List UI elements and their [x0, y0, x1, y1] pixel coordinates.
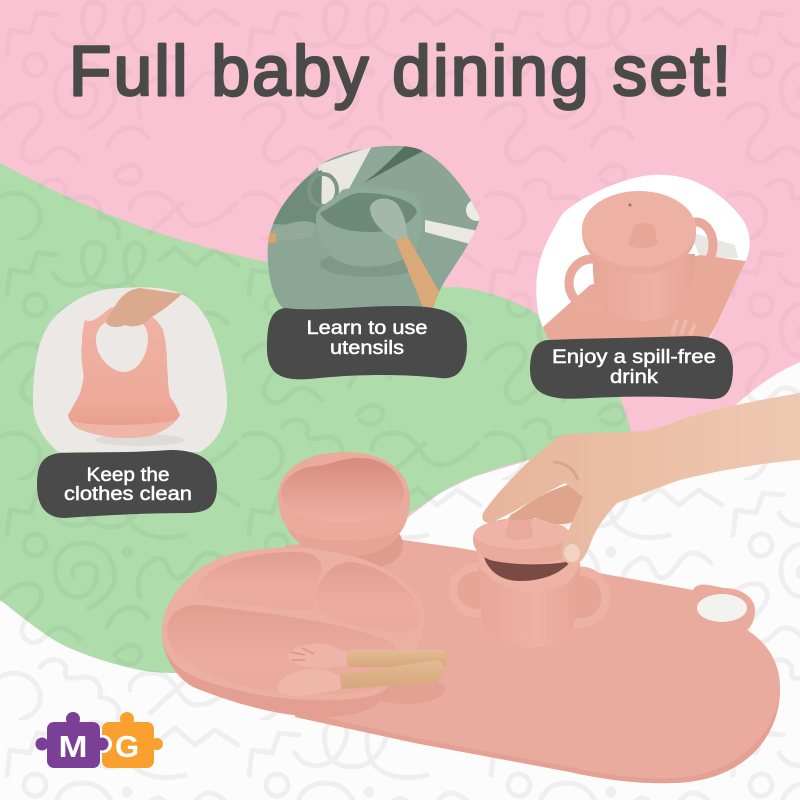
right handle — [693, 218, 718, 257]
badge: learn to use utensils — [267, 306, 467, 379]
hand and arm — [482, 393, 800, 565]
cup lid top — [474, 519, 570, 549]
spoon with wooden handle — [277, 660, 444, 696]
long lower compartment — [167, 605, 397, 695]
cup body — [478, 565, 580, 647]
cup rim — [477, 553, 580, 590]
cup right handle — [554, 571, 606, 623]
thumb nail — [564, 544, 580, 562]
bib shadow — [95, 434, 185, 446]
training cup with lid — [453, 512, 606, 647]
cup opening — [484, 557, 571, 581]
grey shadow behind cup — [694, 234, 738, 258]
notch — [94, 735, 112, 753]
fork tines — [291, 648, 314, 660]
fork wood tip — [268, 233, 276, 243]
badge: keep the clothes clean — [37, 450, 217, 518]
bib — [68, 306, 180, 438]
bowl foot band — [287, 528, 401, 557]
upper-right folded mat — [428, 154, 480, 227]
cup spout — [505, 512, 533, 540]
fold shadow — [363, 146, 425, 183]
badge: learn to use utensils: utensils — [330, 337, 404, 359]
hand holding the bib — [106, 288, 182, 327]
light backdrop — [318, 146, 372, 205]
upper-right compartment — [315, 562, 420, 633]
cup body — [593, 254, 695, 321]
fork tips — [672, 320, 695, 335]
back fingers — [508, 483, 590, 524]
badge: keep the clothes clean: clothes clean — [64, 483, 192, 505]
cup lid side — [473, 518, 570, 564]
logo: MG puzzle pieces — [36, 712, 163, 768]
bowl outside — [278, 452, 410, 557]
badge: enjoy a spill-free drink: Enjoy a spill-free — [552, 346, 716, 368]
bib pocket — [72, 420, 176, 438]
spoon — [370, 199, 407, 241]
badge: learn to use utensils: Learn to use — [306, 317, 428, 339]
upper-left compartment — [197, 552, 321, 610]
spout — [628, 223, 658, 248]
white stripe — [425, 220, 478, 244]
letter G: G — [115, 729, 139, 764]
placemat — [285, 540, 780, 783]
pink mat — [543, 255, 752, 345]
divided plate — [162, 548, 425, 717]
background: white lower area — [0, 362, 800, 800]
purple piece — [36, 712, 108, 768]
cup left handle — [453, 567, 503, 613]
panel: green utensils photo — [268, 146, 480, 310]
suction bowl — [278, 452, 410, 567]
lid air hole — [628, 204, 632, 206]
badge: keep the clothes clean: Keep the — [86, 464, 170, 486]
background: green blob — [0, 163, 631, 673]
lid top — [582, 191, 696, 267]
wooden handle — [396, 236, 440, 310]
badge: enjoy a spill-free drink: drink — [610, 366, 658, 388]
background: white squiggle pattern — [0, 362, 800, 800]
panel: bib photo — [30, 280, 230, 455]
green cup handle — [309, 174, 337, 206]
bowl interior — [281, 458, 404, 522]
placemat hanging hole — [697, 594, 747, 622]
knuckle crease — [553, 462, 578, 480]
white oval at edge — [466, 200, 480, 221]
green fork — [286, 221, 316, 226]
fork with wooden handle — [288, 643, 447, 668]
orange piece — [102, 712, 163, 768]
placemat lower rim — [295, 692, 780, 783]
title: Full baby dining set! — [69, 31, 731, 110]
bowl suction base — [347, 523, 403, 567]
lid rim — [582, 230, 696, 274]
bowl interior — [320, 193, 417, 232]
plate top surface — [162, 548, 425, 700]
upper-left folded mat — [350, 146, 410, 187]
left handle — [564, 254, 593, 302]
background: green squiggle pattern — [0, 163, 631, 673]
plate shadow on placemat — [365, 676, 445, 704]
green bowl — [316, 188, 403, 266]
green cup — [273, 170, 322, 226]
letter M: M — [58, 729, 88, 764]
suction ring — [320, 256, 408, 277]
panel: sippy cup photo — [536, 174, 750, 340]
badge: enjoy a spill-free drink — [530, 336, 733, 399]
